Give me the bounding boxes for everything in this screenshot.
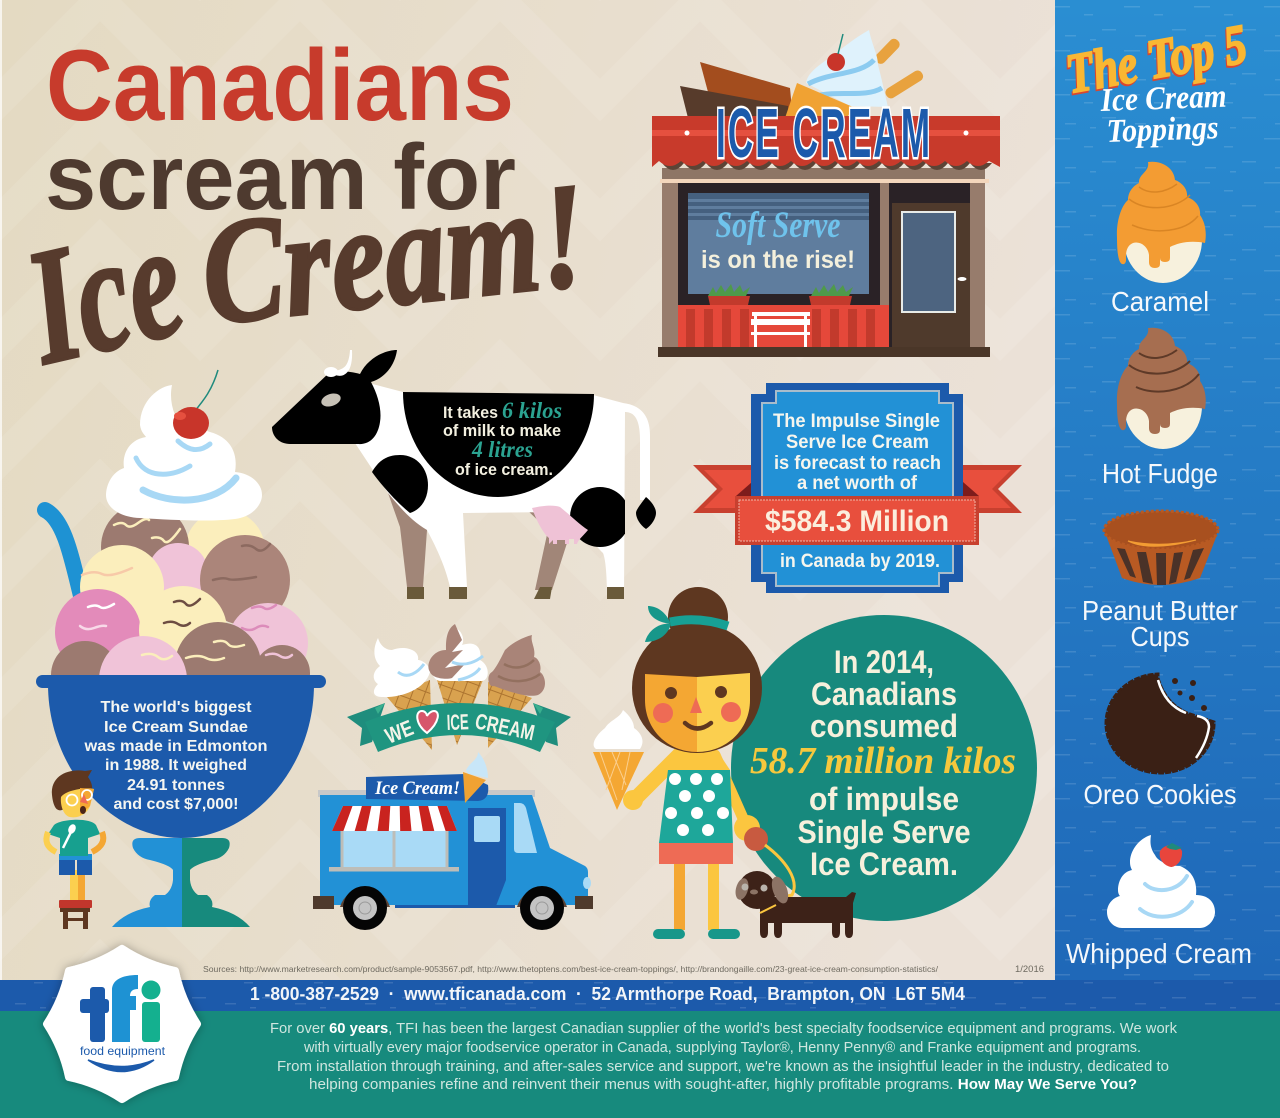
shop window text (701, 205, 855, 274)
girl arms (623, 754, 768, 851)
footer about panel: helping companies refine and reinvent their menus with sought-after, highly profitable programs. How May We Serve You? (309, 1076, 1137, 1093)
footer about panel: with virtually every major foodservice operator in Canada, supplying Taylor®, Henny Penny® and Franke equipment and programs. (303, 1039, 1141, 1056)
peanut butter cups label: Cups (1130, 621, 1190, 652)
forecast text: Serve Ice Cream (786, 432, 929, 453)
title: scream for (45, 125, 516, 229)
ribbon text (382, 708, 537, 749)
sundae fact: Ice Cream Sundae (104, 719, 248, 736)
logo smile (88, 1060, 154, 1072)
we love ice cream cones (347, 624, 571, 752)
consumption fact: 58.7 million kilos (750, 740, 1016, 782)
shop window text: Soft Serve (716, 205, 840, 246)
ribbon (347, 703, 571, 752)
forecast text: is forecast to reach (774, 453, 941, 474)
ribbon text: CREAM (473, 708, 537, 745)
date: 1/2016 (1015, 964, 1044, 975)
boy on stool (46, 770, 103, 929)
red value band: $584.3 Million (765, 505, 949, 538)
sundae (36, 370, 326, 927)
right cone (488, 635, 545, 748)
girl with ice cream and dog (593, 587, 856, 939)
sundae fact: in 1988. It weighed (105, 757, 247, 774)
toppings side panel (1055, 0, 1280, 980)
ribbon text: WE (382, 715, 417, 749)
consumption fact: of impulse (809, 781, 959, 817)
shop rooftop ice cream cone (680, 30, 925, 118)
truck wheels (313, 877, 593, 930)
red value band (735, 496, 979, 545)
cow saddle with fact: of ice cream. (455, 461, 553, 479)
shop awning (652, 116, 1000, 170)
title: Canadians (46, 30, 514, 142)
sundae fact: and cost $7,000! (114, 796, 238, 813)
forecast text: in Canada by 2019. (780, 551, 940, 572)
sundae fact: The world's biggest (100, 699, 252, 716)
footer contact bar: 1 -800-387-2529 · www.tficanada.com · 52 Armthorpe Road, Brampton, ON L6T 5M4 (250, 983, 966, 1004)
oreo cookie topping (1106, 674, 1214, 773)
caramel topping (1117, 162, 1206, 283)
truck door (468, 803, 537, 906)
toppings heading: Ice Cream (1099, 79, 1227, 119)
logo tagline: food equipment (80, 1044, 166, 1058)
spoon (45, 510, 82, 600)
footer about panel: For over 60 years, TFI has been the largest Canadian supplier of the world's best specialty foodservice equipment and programs. We work (270, 1020, 1177, 1037)
ice cream truck (313, 752, 593, 930)
title: Cream! (194, 151, 594, 357)
left cone (374, 638, 432, 750)
peanut butter cups label (1082, 595, 1238, 652)
bowl stem (112, 838, 250, 927)
footer about panel (0, 1011, 1280, 1118)
consumption fact: consumed (810, 708, 958, 744)
cherry (173, 370, 218, 439)
ice cream shop (652, 30, 1000, 357)
caramel label: Caramel (1111, 286, 1209, 317)
cow saddle with fact: 4 litres (471, 437, 533, 462)
truck sign (366, 752, 488, 803)
girl dress (659, 750, 733, 864)
girl ice cream cone (593, 710, 644, 810)
heart (417, 711, 438, 733)
blue frame (751, 383, 963, 593)
bowl (36, 675, 326, 838)
ice cream scoops (51, 512, 310, 675)
truck sign: Ice Cream! (374, 778, 460, 799)
consumption fact: Canadians (811, 676, 957, 712)
cow body (355, 382, 650, 598)
logo letters (80, 975, 160, 1042)
whipped cream label: Whipped Cream (1066, 938, 1252, 969)
truck roof (318, 790, 535, 797)
cow saddle with fact: It takes (443, 404, 498, 422)
title (10, 30, 594, 399)
ribbon tails (693, 465, 1022, 513)
inner frame (762, 391, 953, 586)
cow udder (532, 506, 588, 544)
toppings heading (1060, 13, 1251, 150)
cow saddle with fact (403, 392, 594, 497)
sundae fact (83, 699, 268, 813)
middle cone (428, 624, 488, 745)
tfi logo badge (47, 949, 197, 1099)
background panel (0, 0, 1055, 980)
forecast badge (693, 383, 1022, 593)
truck body (320, 795, 588, 905)
peanut butter cup topping (1104, 511, 1218, 585)
dog (733, 845, 856, 938)
cow far legs (388, 493, 567, 590)
footer contact bar (0, 980, 1280, 1011)
cow (272, 350, 656, 599)
peanut butter cups label: Peanut Butter (1082, 595, 1238, 626)
cow saddle with fact: of milk to make (443, 422, 561, 440)
consumption fact: In 2014, (834, 644, 934, 680)
truck serving window (329, 806, 459, 872)
whipped cream topping (1107, 835, 1215, 928)
consumption fact: Ice Cream. (810, 846, 958, 882)
girl legs (653, 860, 740, 939)
cow saddle with fact: 6 kilos (502, 398, 562, 423)
shop window text: is on the rise! (701, 246, 855, 274)
shop building (658, 168, 990, 357)
footer about panel: From installation through training, and after-sales service and support, we're known as the insightful leader in the industry, dedicated to (277, 1058, 1169, 1075)
sundae fact: was made in Edmonton (83, 738, 268, 755)
hot fudge label: Hot Fudge (1102, 458, 1218, 489)
teal consumption circle (731, 615, 1037, 921)
cow head (272, 350, 397, 444)
cow hooves (407, 587, 624, 599)
cow spots (372, 455, 656, 547)
sources line: Sources: http://www.marketresearch.com/product/sample-9053567.pdf, http://www.thetoptens.com/best-ice-cream-toppings/, http://brandongaille.com/23-great-ice-cream-consumption-statistics/ (203, 964, 939, 974)
forecast text: The Impulse Single (773, 411, 940, 432)
sundae fact: 24.91 tonnes (127, 777, 225, 794)
girl head (632, 587, 762, 753)
forecast text (773, 411, 941, 572)
consumption fact: Single Serve (798, 814, 970, 850)
ribbon text: ICE (446, 709, 469, 735)
oreo cookies label: Oreo Cookies (1084, 779, 1236, 810)
shop sign: ICE CREAM (716, 94, 930, 172)
title: Ice (10, 187, 198, 399)
hot fudge topping (1117, 328, 1206, 449)
forecast text: a net worth of (797, 473, 918, 494)
consumption fact (750, 644, 1016, 882)
toppings heading: Toppings (1106, 110, 1219, 150)
whipped cream topping (106, 385, 262, 521)
